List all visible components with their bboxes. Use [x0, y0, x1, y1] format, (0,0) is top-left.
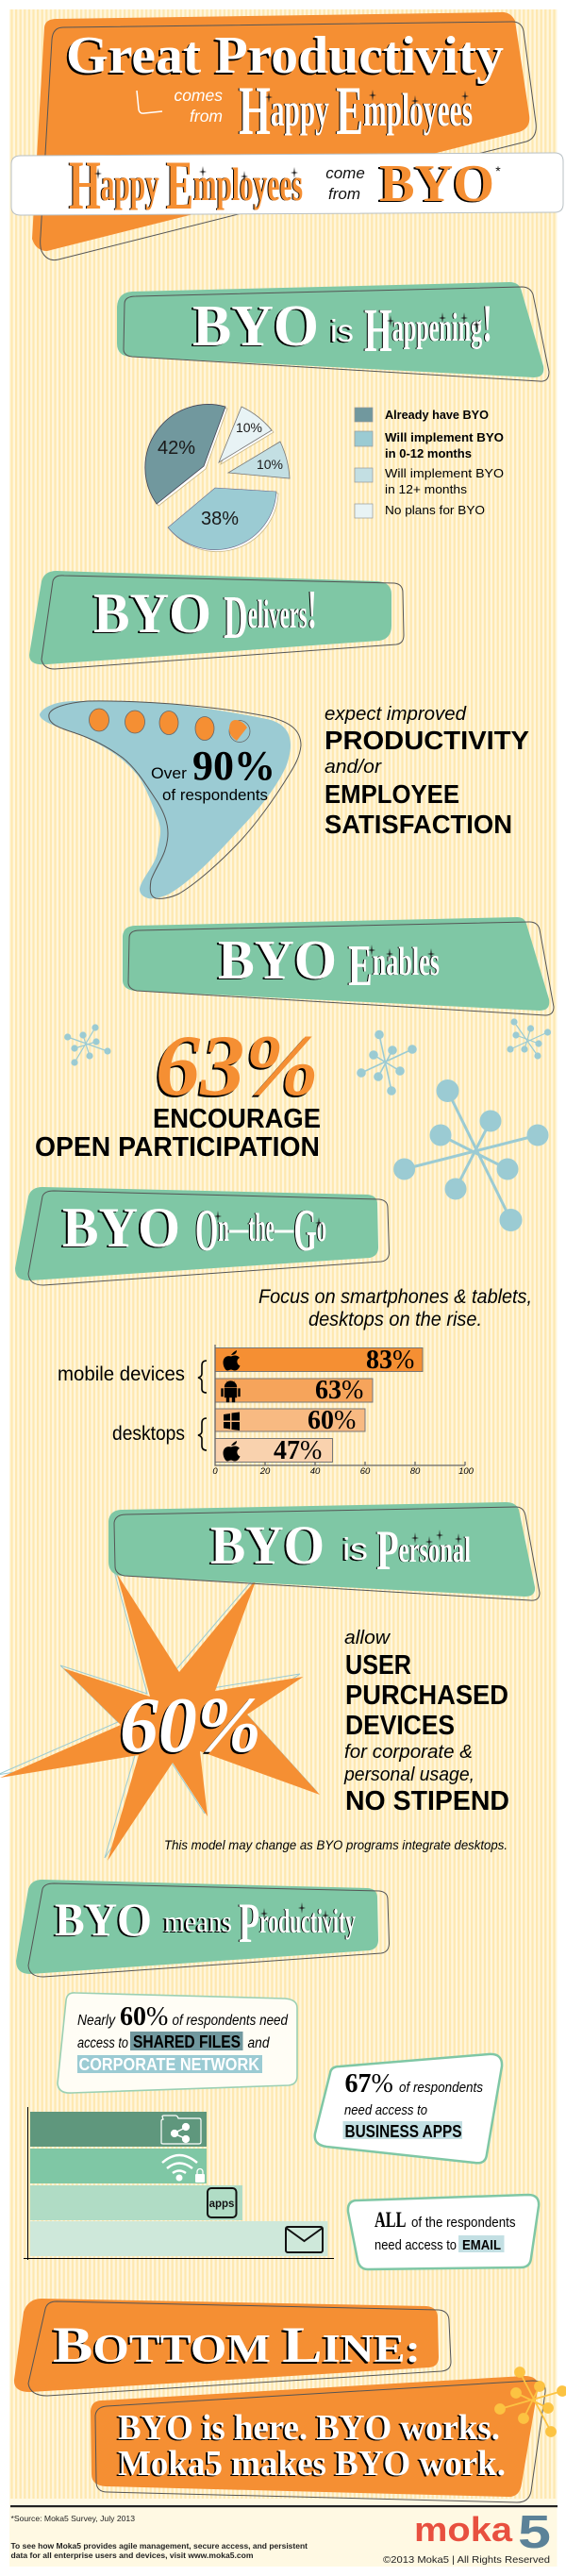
- note: This model may change as BYO programs integrate desktops.: [164, 1837, 508, 1852]
- pie legend: [355, 408, 504, 518]
- slice 10% later: [228, 442, 290, 478]
- chart subtitle: Focus on smartphones & tablets,: [258, 1286, 532, 1308]
- axis labels: 40: [310, 1466, 321, 1477]
- comes from: from: [190, 107, 223, 125]
- card: business apps: [315, 2054, 502, 2163]
- of respondents: of respondents: [162, 786, 268, 804]
- Moka5 makes text: Moka5 makes BYO work.: [118, 2444, 506, 2484]
- means: means: [164, 1904, 232, 1938]
- header: BYO On-the-Go: [15, 1187, 389, 1285]
- Enables: E: [348, 934, 373, 998]
- On-the-Go: O: [195, 1196, 218, 1263]
- bar chart: devices: [212, 1345, 474, 1477]
- Delivers!: !: [308, 578, 317, 640]
- card: email: [348, 2195, 539, 2269]
- bar chart: access needs: [24, 2107, 334, 2260]
- header: BYO Delivers: [29, 571, 404, 669]
- pie legend: No plans for BYO: [385, 503, 485, 517]
- slice 42%: [145, 404, 227, 506]
- text: allow user purchased devices: personal usage,: [343, 1765, 474, 1785]
- banner: come from: come: [325, 164, 365, 182]
- axes: [24, 2107, 334, 2260]
- banner: Happy Employees: appy: [101, 158, 166, 210]
- snowflake medium: [358, 1030, 416, 1095]
- bars: [30, 2112, 328, 2256]
- card: shared files: CORPORATE NETWORK: [79, 2055, 259, 2074]
- card: business apps: need access to: [344, 2102, 427, 2118]
- banner: Happy Employees: [69, 147, 303, 225]
- icon: secure wifi: [162, 2155, 205, 2183]
- Productivity: [239, 1892, 356, 1954]
- card: business apps: of respondents: [399, 2080, 483, 2096]
- value labels: 60%: [308, 1406, 356, 1435]
- slice 38%: 38%: [201, 509, 239, 529]
- card: email: of the respondents: [411, 2215, 515, 2231]
- Over 90%: Over: [151, 764, 187, 782]
- card: email: ALL: [375, 2208, 406, 2232]
- snowflake small right: [508, 1019, 551, 1059]
- pie legend: Will implement BYO: [385, 430, 504, 444]
- comes from: [174, 86, 223, 125]
- value labels: 63%: [315, 1376, 363, 1405]
- slice 10% none: [219, 407, 274, 464]
- text: expect improved productivity: [325, 704, 529, 839]
- bars: [215, 1347, 423, 1463]
- Over 90%: [151, 743, 275, 789]
- pie chart: [145, 404, 290, 552]
- Productivity: P: [239, 1892, 259, 1954]
- title: Great Productivity: Great Productivity: [66, 26, 504, 85]
- chart subtitle: desktops on the rise.: [308, 1309, 482, 1330]
- Enables: [348, 934, 440, 998]
- footer: [10, 2505, 558, 2566]
- On-the-Go: [195, 1196, 326, 1263]
- title: Happy Employees: mployees: [363, 83, 473, 136]
- group label: mobile devices: mobile devices: [58, 1363, 185, 1385]
- text: expect improved productivity: SATISFACTION: [325, 810, 512, 839]
- title: Happy Employees: H: [239, 73, 271, 150]
- text: allow user purchased devices: [343, 1628, 509, 1816]
- value labels: [274, 1346, 414, 1465]
- boomerang: over 90% of respondents: [40, 701, 301, 898]
- Enables: nables: [373, 941, 440, 984]
- Delivers!: elivers: [248, 594, 308, 637]
- call to action: [11, 2541, 308, 2560]
- white banner: [11, 147, 563, 225]
- card: email: EMAIL: [462, 2237, 501, 2253]
- BYO: BYO: [192, 294, 319, 359]
- text: expect improved productivity: and/or: [325, 757, 382, 778]
- value labels: 83%: [366, 1346, 414, 1375]
- is: is: [330, 313, 354, 348]
- stat: 63%: 63%: [156, 1017, 319, 1113]
- text: allow user purchased devices: USER: [345, 1650, 411, 1681]
- Bottom Line heading: BOTTOM LINE:: [53, 2317, 421, 2373]
- Personal: ersonal: [399, 1531, 471, 1570]
- snowflake large: [395, 1081, 547, 1230]
- On-the-Go: n—the—: [218, 1207, 294, 1250]
- slice 42%: 42%: [158, 438, 195, 459]
- text: expect improved productivity: EMPLOYEE: [325, 779, 459, 809]
- slice 10% later: 10%: [257, 457, 283, 472]
- value labels: 47%: [274, 1436, 322, 1465]
- BYO: BYO: [218, 928, 337, 991]
- icon: apps: [208, 2188, 236, 2217]
- bracket mark: [137, 91, 162, 113]
- card: shared files: Nearly: [77, 2013, 116, 2029]
- panel: BYO is here: [91, 2376, 545, 2502]
- card: shared files: and: [247, 2035, 271, 2051]
- slice 10% none: 10%: [236, 420, 262, 435]
- card: shared files: 60%: [120, 2002, 168, 2032]
- asterisk: *: [495, 163, 501, 178]
- logo: moka: [414, 2510, 513, 2549]
- Happening!: H: [364, 296, 392, 365]
- header: BYO Enables: [123, 917, 554, 1015]
- icon: apps: apps: [209, 2199, 234, 2210]
- title panel: [32, 12, 536, 260]
- icon: windows: [224, 1412, 240, 1430]
- Personal: [376, 1519, 471, 1581]
- axis labels: 60: [360, 1466, 371, 1477]
- title: Happy Employees: [239, 73, 473, 150]
- group label: mobile devices: [58, 1361, 207, 1393]
- text: allow user purchased devices: DEVICES: [345, 1711, 455, 1741]
- icon: apple: [223, 1350, 240, 1370]
- progress dots: [89, 709, 250, 742]
- banner: Happy Employees: mployees: [193, 158, 303, 210]
- BYO: BYO: [62, 1196, 180, 1259]
- icon: email: [286, 2227, 323, 2252]
- BYO: BYO: [210, 1514, 325, 1576]
- card: shared files: of respondents need: [172, 2013, 289, 2029]
- axis labels: 20: [259, 1466, 271, 1477]
- text: expect improved productivity: PRODUCTIVITY: [325, 726, 529, 755]
- card: business apps: BUSINESS APPS: [345, 2122, 462, 2141]
- header: BYO is Happening: [117, 282, 549, 381]
- card: business apps: 67%: [345, 2069, 393, 2099]
- card: email: need access to: [375, 2237, 457, 2253]
- text: expect improved productivity: expect improved: [325, 704, 467, 725]
- stat: 60%: 60%: [120, 1681, 261, 1769]
- starburst fill: [0, 1574, 320, 1861]
- Over 90%: 90%: [192, 743, 275, 789]
- header: BYO means Productivity: [16, 1880, 389, 1977]
- icon: shared folder: [161, 2116, 201, 2144]
- logo: [414, 2507, 551, 2558]
- axes: [215, 1345, 465, 1465]
- card: shared files: [58, 1993, 297, 2093]
- text: allow user purchased devices: NO STIPEND: [345, 1786, 509, 1816]
- comes from: comes: [174, 86, 223, 105]
- group label: desktops: [112, 1418, 207, 1450]
- axis labels: 80: [410, 1466, 421, 1477]
- encourage open participation: OPEN PARTICIPATION: [35, 1132, 320, 1163]
- text: allow user purchased devices: allow: [344, 1628, 391, 1648]
- copyright: ©2013 Moka5 | All Rights Reserved: [383, 2554, 550, 2566]
- slice 38%: [168, 488, 278, 552]
- BYO: BYO: [55, 1893, 152, 1946]
- snowflake yellow: [495, 2367, 566, 2436]
- text: allow user purchased devices: for corporate &: [344, 1742, 473, 1763]
- title: Happy Employees: E: [336, 73, 363, 150]
- On-the-Go: G: [293, 1196, 317, 1263]
- card: shared files: SHARED FILES: [133, 2032, 241, 2051]
- axis labels: [212, 1466, 474, 1477]
- call to action: To see how Moka5 provides agile management, secure access, and persistent: [11, 2541, 308, 2551]
- pie legend: in 12+ months: [385, 482, 468, 496]
- snowflake small left: [65, 1025, 110, 1065]
- title: Happy Employees: appy: [271, 83, 336, 136]
- pie legend: Already have BYO: [385, 408, 489, 422]
- chart subtitle: [258, 1286, 532, 1330]
- Happening!: !: [482, 294, 492, 353]
- banner: come from: [325, 164, 365, 203]
- Delivers!: D: [224, 583, 248, 652]
- starburst: [0, 1571, 317, 1858]
- source: *Source: Moka5 Survey, July 2013: [11, 2514, 135, 2523]
- call to action: data for all enterprise users and devices, visit www.moka5.com: [11, 2551, 254, 2560]
- panel: bottom line: [14, 2299, 451, 2396]
- encourage open participation: [35, 1104, 321, 1163]
- pie legend: in 0-12 months: [385, 446, 472, 460]
- text: allow user purchased devices: PURCHASED: [345, 1681, 508, 1711]
- Productivity: roductivity: [259, 1902, 356, 1940]
- banner: come from: from: [328, 185, 360, 203]
- header: BYO On-the-Go: o: [317, 1207, 326, 1250]
- Personal: P: [376, 1519, 399, 1581]
- card: shared files: access to: [77, 2035, 128, 2051]
- icon: android: [221, 1381, 240, 1402]
- Happening!: appening: [392, 307, 482, 350]
- header: BYO is Personal: [108, 1502, 540, 1600]
- banner: BYO: BYO: [379, 155, 494, 213]
- logo: 5: [518, 2507, 551, 2558]
- icon: apple: [223, 1441, 240, 1461]
- pie legend: Will implement BYO: [385, 466, 504, 480]
- axis labels: 0: [212, 1466, 218, 1477]
- encourage open participation: ENCOURAGE: [153, 1104, 321, 1134]
- is: is: [342, 1531, 368, 1566]
- banner: Happy Employees: H: [69, 147, 101, 225]
- axis labels: 100: [458, 1466, 474, 1477]
- BYO is here text: BYO is here. BYO works.: [118, 2408, 500, 2448]
- Happening!: [364, 294, 492, 365]
- group label: desktops: desktops: [112, 1423, 185, 1445]
- banner: Happy Employees: E: [166, 147, 193, 225]
- BYO: BYO: [93, 582, 211, 644]
